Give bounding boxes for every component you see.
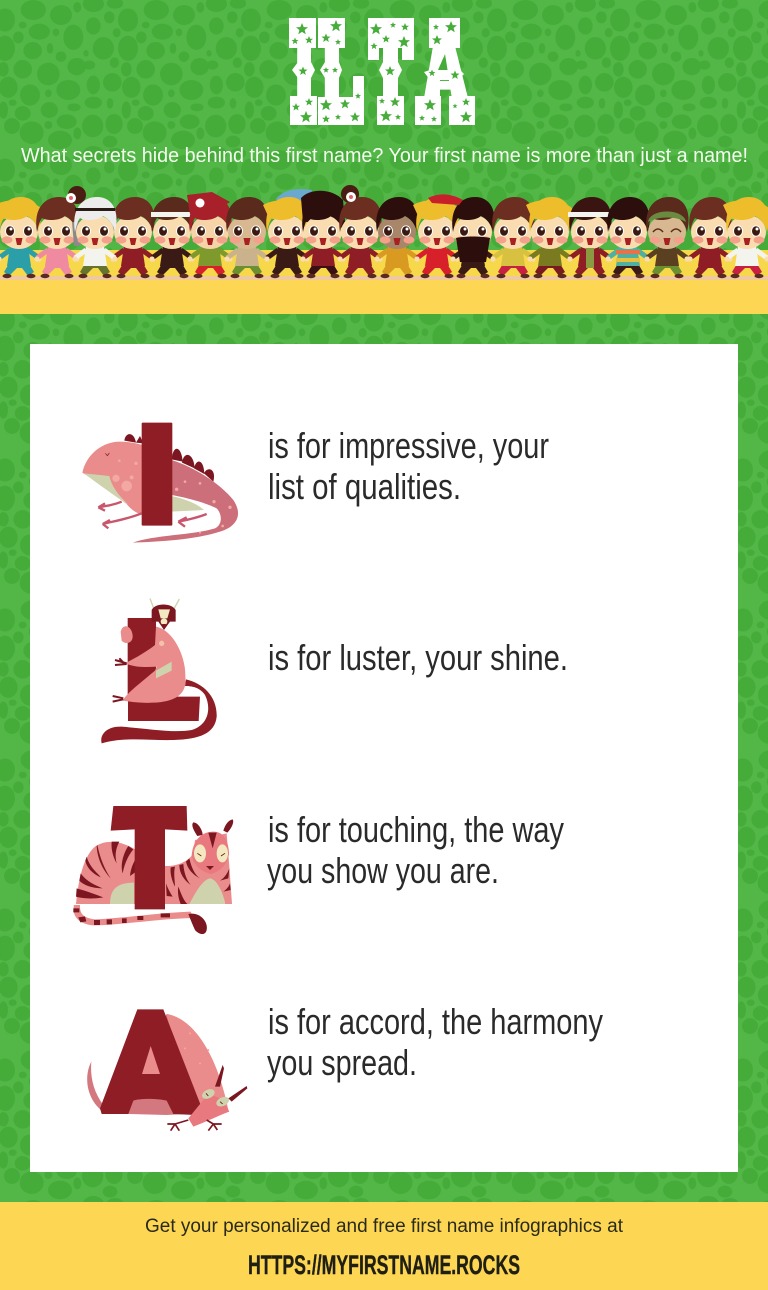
text: A line — [267, 1001, 603, 1083]
text: I line: is for impressive, your — [268, 425, 549, 466]
white content panel — [30, 344, 738, 1172]
footer url: HTTPS://MYFIRSTNAME.ROCKS — [248, 1250, 520, 1280]
text: T line: you show you are. — [267, 850, 499, 891]
text: A line: is for accord, the harmony — [268, 1001, 603, 1042]
footer caption: Get your personalized and free first name infographics at — [145, 1216, 624, 1237]
text: L line: is for luster, your shine. — [268, 637, 568, 678]
subtitle: What secrets hide behind this first name? Your first name is more than just a name! — [21, 145, 748, 167]
text: A line: you spread. — [267, 1042, 417, 1083]
text: T line: is for touching, the way — [268, 809, 564, 850]
yellow ground band — [0, 250, 768, 314]
icon: tiger letter T — [73, 806, 233, 934]
text: I line: list of qualities. — [268, 466, 461, 507]
row of cartoon children — [0, 185, 768, 278]
footer — [0, 1202, 768, 1290]
icon: lemur letter L — [101, 598, 217, 743]
text: T line — [267, 809, 564, 891]
icon: armadillo letter A — [87, 1009, 247, 1131]
icon: iguana letter I — [82, 423, 238, 543]
text: I line — [268, 425, 549, 507]
